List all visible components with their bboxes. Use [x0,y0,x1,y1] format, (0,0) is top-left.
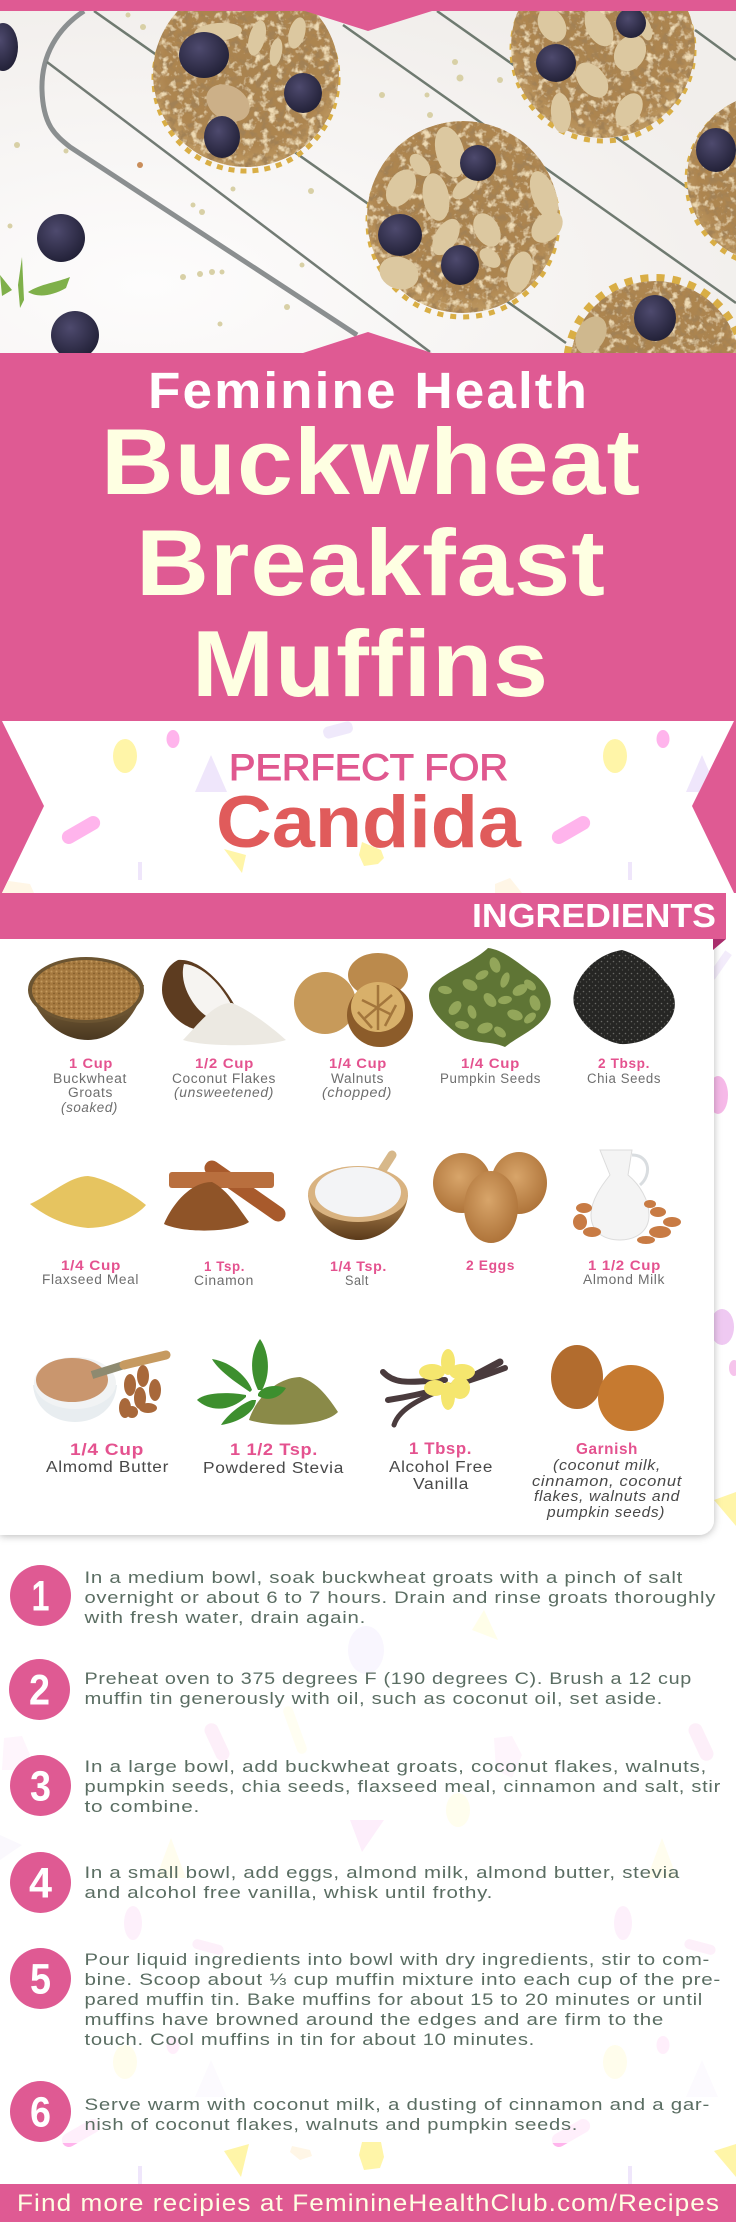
title: Buckwheat Breakfast Muffins: Buckwheat [101,409,641,514]
ingredient: buckwheat groats [28,957,144,1115]
heading: ingredients: INGREDIENTS [472,897,716,934]
muffin 3 [511,0,695,141]
ingredient: walnuts: Walnuts [331,1071,384,1086]
ribbon confetti [2,720,718,893]
ingredient: chia seeds: Chia Seeds [587,1071,661,1086]
step 4 [10,1852,680,1913]
ingredient: garnish: flakes, walnuts and [534,1489,680,1505]
step 2: 2 [29,1666,50,1714]
panel: ingredients card [0,939,714,1535]
ingredient: buckwheat groats: Buckwheat [53,1071,127,1086]
ingredient: coconut flakes: Coconut Flakes [172,1071,276,1086]
muffin 1 [153,0,339,171]
step 6: 6 [30,2088,51,2136]
step 5: Pour liquid ingredients into bowl with dry ingredients, stir to com- [84,1950,710,1969]
ingredient: chia seeds [573,950,675,1086]
ribbon: perfect for candida [0,720,736,893]
footer link text: Find more recipies at FeminineHealthClub.com/Recipes [17,2190,720,2217]
step 5: bine. Scoop about ⅓ cup muffin mixture into each cup of the pre- [84,1970,721,1989]
ingredient: salt [308,1155,408,1288]
step 1: with fresh water, drain again. [83,1608,366,1627]
ingredient: pumpkin seeds [429,948,551,1086]
ribbon label: perfect for: PERFECT FOR [229,747,508,788]
ingredient: almond milk: 1 1/2 Cup [588,1258,661,1273]
ingredient: garnish: (coconut milk, [553,1458,661,1474]
ingredient: flaxseed meal: 1/4 Cup [61,1258,121,1273]
ingredient: almond butter: 1/4 Cup [70,1440,144,1459]
ingredient: coconut flakes: 1/2 Cup [195,1056,254,1071]
ingredient: walnuts: 1/4 Cup [329,1056,387,1071]
bottom confetti tile [0,1990,736,2184]
ingredient: powdered stevia [197,1339,344,1477]
step 6 [10,2081,710,2142]
ingredient: buckwheat groats: (soaked) [61,1100,118,1115]
muffin 5 [564,274,736,353]
step 2 [9,1659,692,1720]
ingredient: powdered stevia: 1 1/2 Tsp. [230,1440,318,1459]
ingredient: vanilla: 1 Tbsp. [409,1439,472,1458]
step 5: touch. Cool muffins in tin for about 10 minutes. [84,2030,535,2049]
ingredient: buckwheat groats: Groats [68,1085,113,1100]
mint sprig [0,257,70,308]
step 6: Serve warm with coconut milk, a dusting of cinnamon and a gar- [84,2095,710,2114]
background confetti behind steps [0,1610,717,1956]
ingredient: almond milk: Almond Milk [583,1272,665,1287]
top pink band with notch [0,0,736,31]
ingredient: coconut flakes: (unsweetened) [174,1085,274,1100]
step 1: overnight or about 6 to 7 hours. Drain and rinse groats thoroughly [84,1588,716,1607]
ingredient: almond butter: Almomd Butter [46,1459,169,1476]
step 3: In a large bowl, add buckwheat groats, coconut flakes, walnuts, [84,1757,707,1776]
ribbon headline: candida: Candida [216,782,522,863]
ingredient: flaxseed meal [30,1176,146,1287]
step 1 [10,1565,716,1627]
ingredient: almond milk [573,1150,681,1287]
step 3: pumpkin seeds, chia seeds, flaxseed meal, cinnamon and salt, stir [84,1777,721,1796]
ingredient: salt: 1/4 Tsp. [330,1259,387,1274]
ingredients header bar [0,893,726,950]
title: Buckwheat Breakfast Muffins [101,409,641,716]
ingredient: walnuts [294,953,413,1100]
footer band [0,2184,736,2222]
ingredient: cinnamon: Cinamon [194,1273,254,1288]
ingredient: vanilla: Alcohol Free [389,1459,493,1476]
step 2: muffin tin generously with oil, such as coconut oil, set aside. [84,1689,663,1708]
subtitle: Feminine Health: Feminine Health [148,362,589,419]
loose blueberries [0,23,99,359]
ingredient: vanilla [383,1349,505,1493]
step 5: pared muffin tin. Bake muffins for about 15 to 20 minutes or until [84,1990,703,2009]
title: Buckwheat Breakfast Muffins: Muffins [192,611,549,716]
ingredient: salt: Salt [345,1273,369,1288]
ingredient: walnuts: (chopped) [322,1085,392,1100]
step 4: 4 [29,1860,52,1908]
ingredient: eggs: 2 Eggs [466,1258,515,1273]
ingredient: eggs [433,1152,547,1273]
ingredient: chia seeds: 2 Tbsp. [598,1056,650,1071]
step 2: Preheat oven to 375 degrees F (190 degrees C). Brush a 12 cup [84,1669,692,1688]
step 3: 3 [30,1762,51,1810]
step 4: and alcohol free vanilla, whisk until frothy. [84,1883,493,1902]
step 3: to combine. [84,1797,200,1816]
ingredient: pumpkin seeds: Pumpkin Seeds [440,1071,541,1086]
step 6: nish of coconut flakes, walnuts and pumpkin seeds. [84,2115,578,2134]
step 4: In a small bowl, add eggs, almond milk, almond butter, stevia [84,1863,680,1882]
ingredient: garnish: pumpkin seeds) [546,1505,665,1521]
ingredient: almond butter [33,1355,169,1476]
muffin 4 [687,93,736,266]
ingredient: garnish: cinnamon, coconut [532,1474,682,1490]
rack wires [42,11,736,352]
step 1: In a medium bowl, soak buckwheat groats with a pinch of salt [84,1568,683,1587]
ingredient: coconut flakes [162,960,286,1100]
step 5: muffins have browned around the edges and are firm to the [84,2010,664,2029]
hero photo: muffins on cooling rack [0,11,736,353]
title panel [0,353,736,721]
buckwheat specks [8,12,503,326]
title: Buckwheat Breakfast Muffins: Breakfast [136,510,606,615]
step 3 [10,1755,721,1816]
ingredient: vanilla: Vanilla [413,1476,469,1493]
ingredient: pumpkin seeds: 1/4 Cup [461,1056,520,1071]
ingredient: garnish: Garnish [576,1441,638,1458]
hero bottom peak [303,332,432,353]
background confetti at card edge [708,950,736,1526]
ingredient: cinnamon: 1 Tsp. [204,1259,245,1274]
ingredient: buckwheat groats: 1 Cup [69,1056,113,1071]
ingredient: powdered stevia: Powdered Stevia [203,1460,344,1477]
step 1: 1 [32,1572,50,1620]
ingredient: garnish [532,1345,682,1521]
ingredient: cinnamon [164,1168,278,1288]
step 5 [10,1948,721,2049]
muffin 2 [367,121,569,317]
ingredient: flaxseed meal: Flaxseed Meal [42,1272,139,1287]
step 5: 5 [30,1956,51,2004]
